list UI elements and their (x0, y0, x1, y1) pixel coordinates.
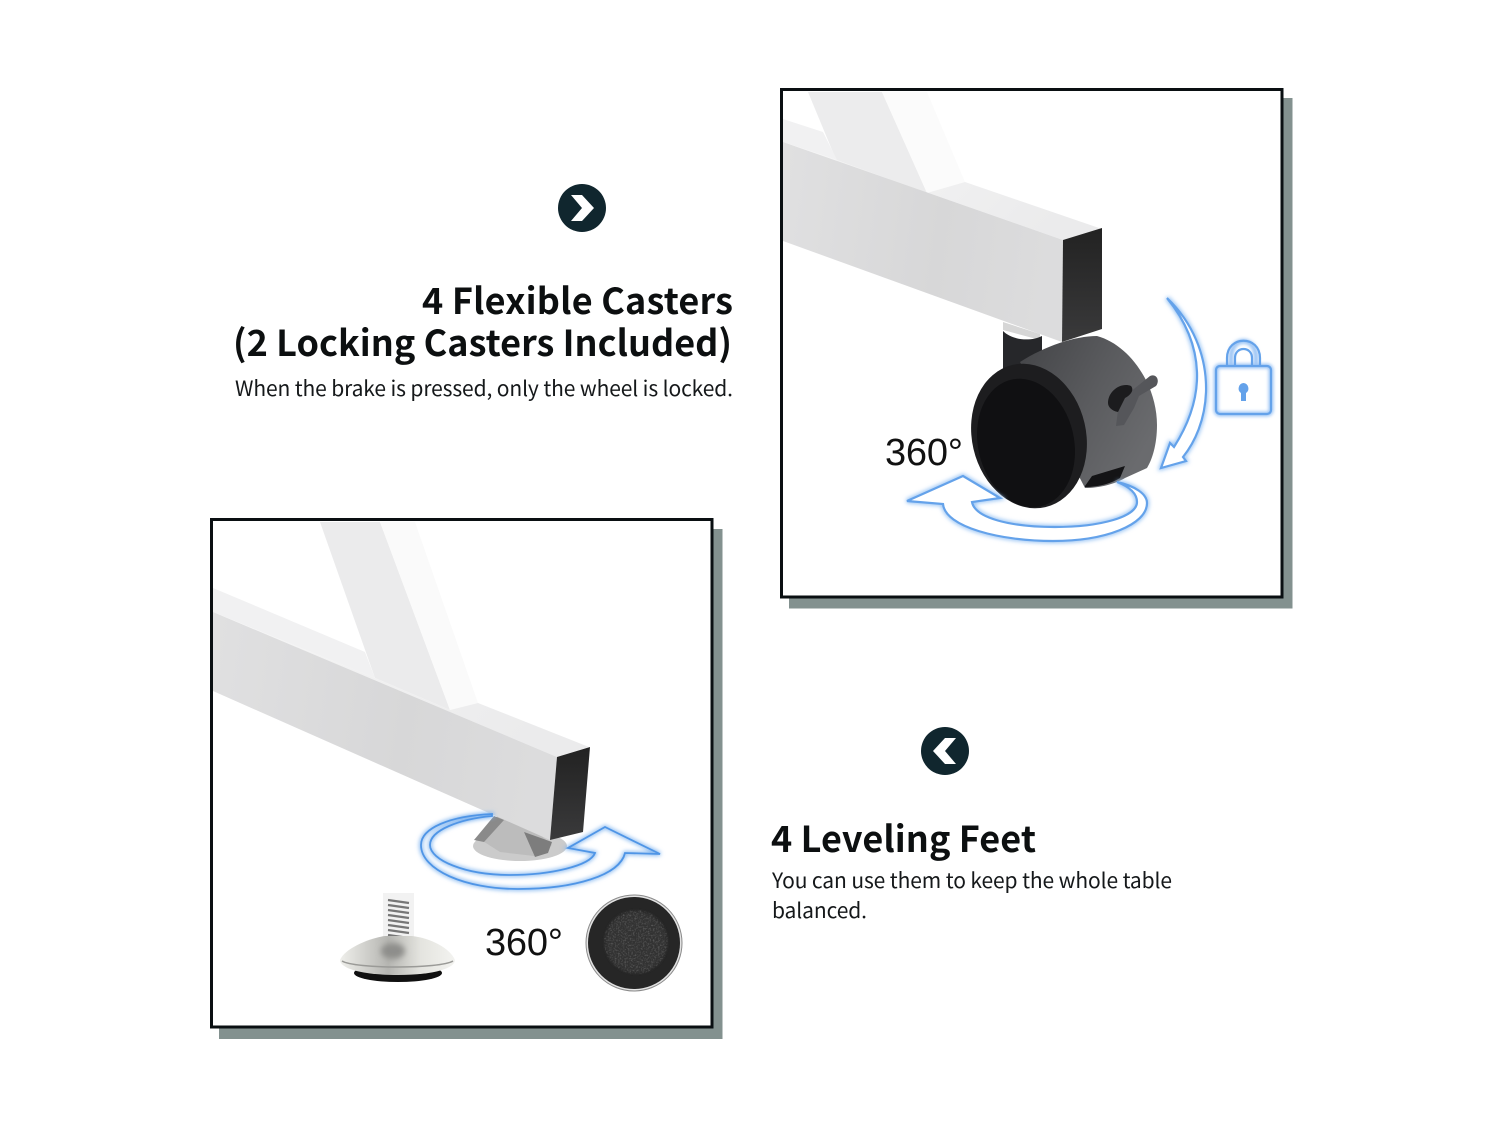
table leg frame (213, 522, 590, 840)
arrow: horizontal rotation (907, 476, 1147, 541)
text: brake description: When the brake is pressed, only the wheel is locked. (235, 373, 733, 403)
text: leveling description (771, 865, 1172, 925)
text: leveling description: balanced. (772, 895, 867, 925)
leveling foot bolt product (340, 893, 455, 982)
table leg frame (783, 92, 1102, 342)
panel: leveling foot photo (212, 520, 722, 1039)
icon: padlock (1216, 341, 1271, 414)
leveling foot under leg (473, 815, 567, 861)
panel border (212, 520, 712, 1027)
black pad of foot (586, 895, 682, 991)
arrow: foot rotation (421, 814, 660, 889)
arrow: wheel rotation (1161, 298, 1206, 468)
label: 360 degrees: 360° (485, 922, 563, 964)
heading: 4 Leveling Feet: 4 Leveling Feet (771, 811, 1036, 863)
label: 360 degrees: 360° (885, 432, 963, 474)
text: leveling description: You can use them to keep the whole table (771, 865, 1172, 895)
panel shadow (219, 529, 722, 1039)
heading: 4 Flexible Casters (233, 273, 733, 367)
icon: right chevron badge (558, 184, 606, 232)
panel: caster photo (782, 90, 1292, 608)
icon: left chevron badge (921, 727, 969, 775)
heading: 4 Flexible Casters: 4 Flexible Casters (422, 273, 733, 325)
brake lever (1116, 375, 1158, 426)
heading: 4 Flexible Casters: (2 Locking Casters Included) (233, 315, 732, 367)
panel shadow (789, 98, 1292, 608)
panel border (782, 90, 1282, 597)
caster wheel (957, 322, 1158, 520)
